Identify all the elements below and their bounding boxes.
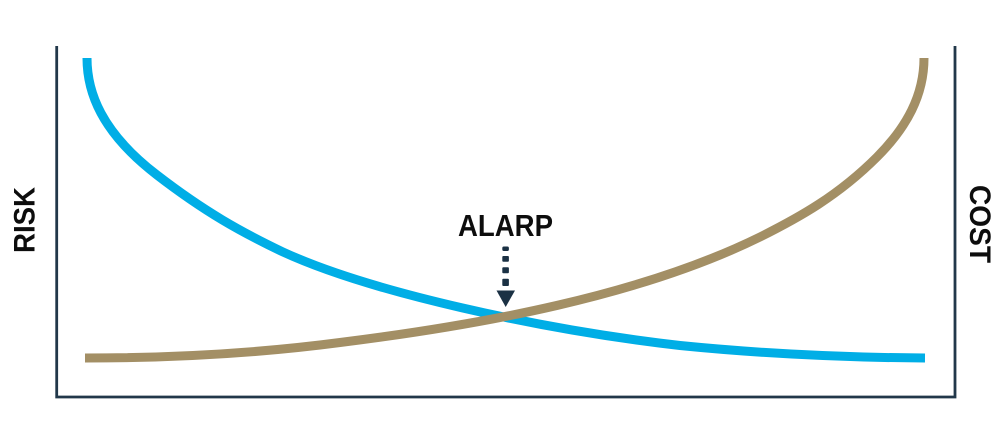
left axis label: RISK: RISK — [8, 187, 42, 253]
risk curve — [87, 58, 925, 358]
cost curve — [85, 58, 924, 358]
arrow: pointer to intersection — [496, 246, 515, 307]
ALARP label: ALARP — [458, 208, 553, 243]
right axis label: COST: COST — [963, 185, 996, 263]
axes — [57, 46, 955, 397]
